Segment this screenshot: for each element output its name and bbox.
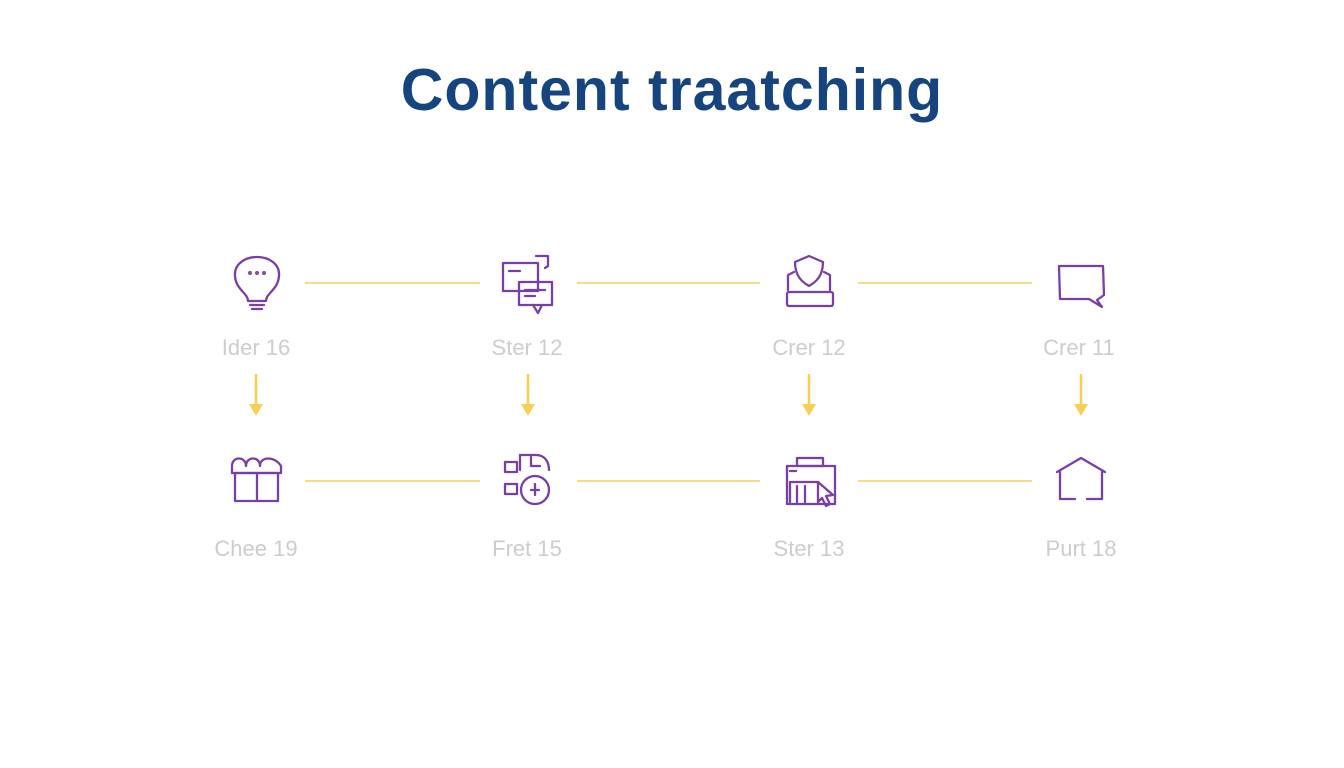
icon: house xyxy=(1057,458,1105,499)
labels: Ster 12 xyxy=(492,335,562,360)
labels: Crer 12 xyxy=(772,335,846,360)
labels: Ider 16 xyxy=(222,335,290,360)
icon: browser cursor xyxy=(787,458,835,506)
arrows xyxy=(249,374,1088,416)
labels: Fret 15 xyxy=(492,536,562,561)
icon: documents chat xyxy=(503,256,552,313)
icon: speech bubble xyxy=(1059,266,1104,307)
labels: Ster 13 xyxy=(774,536,844,561)
labels xyxy=(214,335,1116,561)
icon: gift box xyxy=(232,458,281,501)
icon: shield inbox xyxy=(787,256,833,306)
title: Content traatching xyxy=(401,57,943,123)
labels: Purt 18 xyxy=(1046,536,1116,561)
icon: lightbulb xyxy=(235,257,279,309)
labels: Crer 11 xyxy=(1043,335,1115,360)
labels: Chee 19 xyxy=(214,536,298,561)
icon: file with clock xyxy=(505,455,549,504)
